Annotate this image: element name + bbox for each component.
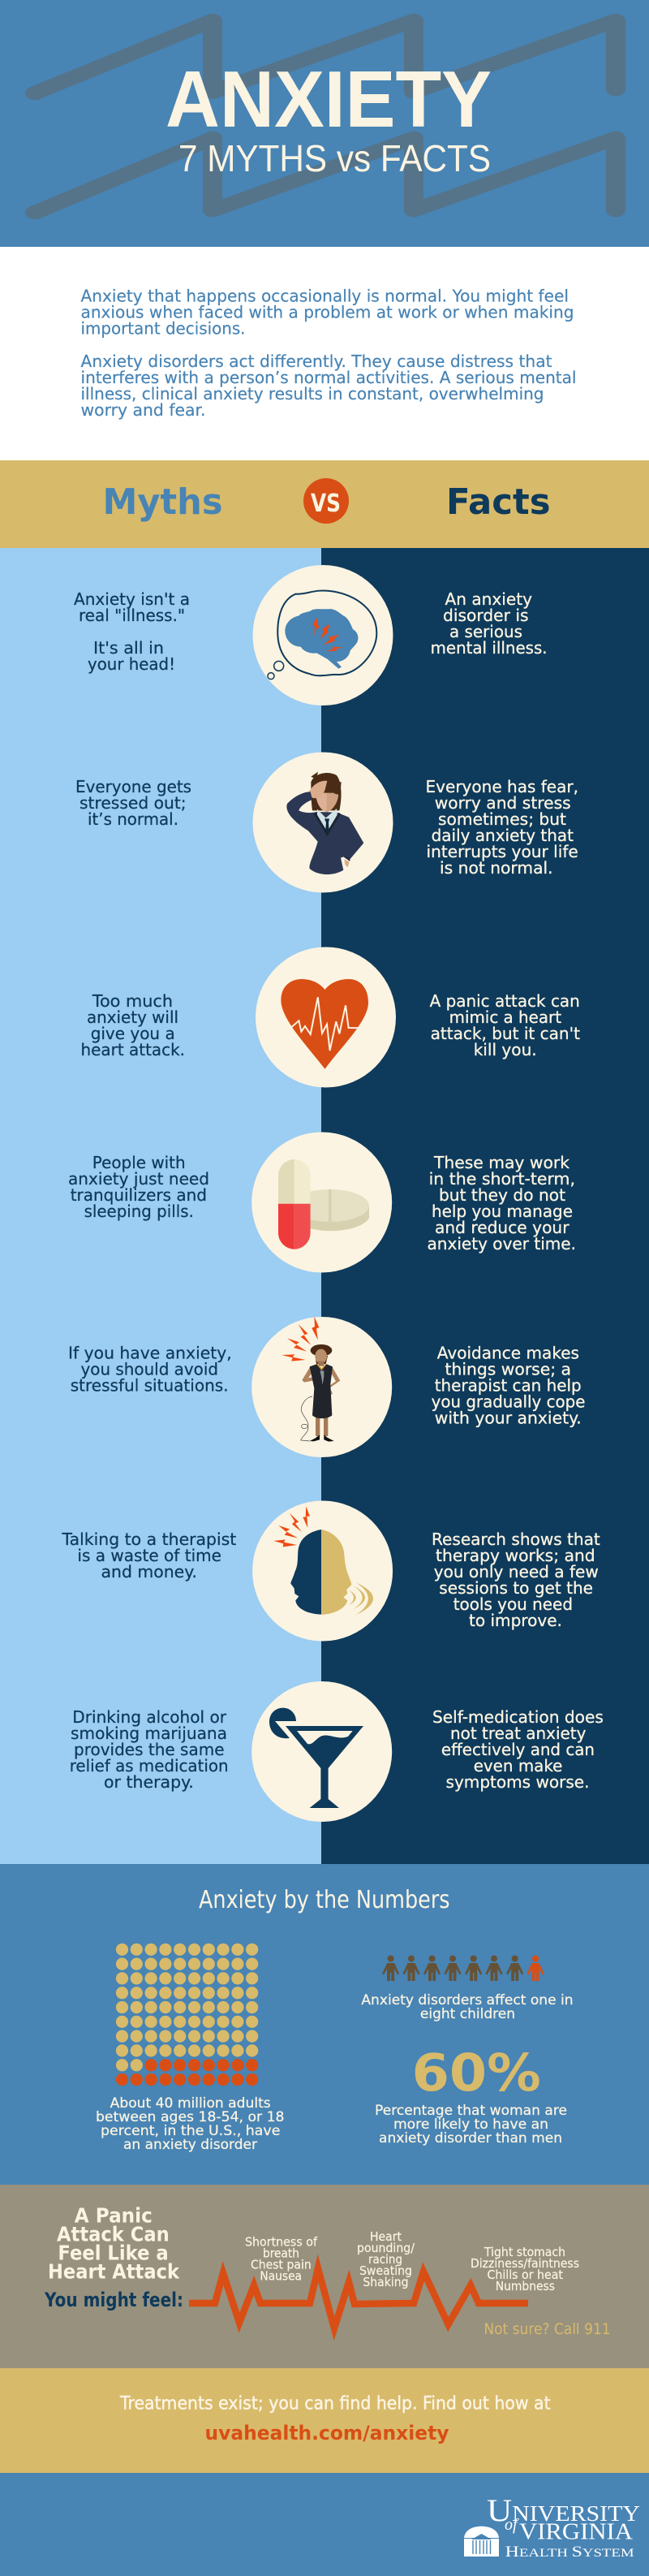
myth 7 text: smoking marijuana — [71, 1724, 227, 1743]
icon: woman with microphone — [251, 1317, 392, 1457]
myth 7 text: relief as medication — [70, 1756, 229, 1776]
chart: ecg line — [189, 2268, 528, 2328]
symptoms group 3: Dizziness/faintness — [471, 2256, 579, 2271]
fact 4 text — [427, 1153, 576, 1253]
panel: header — [0, 0, 649, 247]
fact 1 text: mental illness. — [431, 638, 548, 658]
logo: university of virginia health system — [464, 2493, 640, 2561]
myth 4 text: People with — [92, 1153, 186, 1172]
fact 7 text: even make — [474, 1756, 562, 1776]
fact 5 text: therapist can help — [435, 1375, 582, 1395]
myth 2 text — [75, 777, 191, 829]
heading: panic attack: A Panic — [75, 2203, 153, 2227]
icon: brain in thought bubble — [253, 565, 393, 705]
fact 2 text: worry and stress — [435, 793, 571, 813]
symptoms group 2: pounding/ — [357, 2241, 415, 2255]
myth 6 text: is a waste of time — [77, 1546, 221, 1565]
fact 4 text: but they do not — [439, 1185, 565, 1205]
myth 4 text — [68, 1153, 209, 1221]
symptoms group 2: Sweating — [359, 2263, 412, 2278]
fact 3 text: attack, but it can't — [431, 1024, 580, 1043]
heading: Anxiety by the Numbers — [199, 1886, 450, 1914]
logo: university of virginia health system: HEALTH SYSTEM — [505, 2544, 634, 2561]
symptoms group 2: Heart — [370, 2229, 402, 2244]
panel: myths background — [0, 548, 321, 1864]
symptoms group 2: Shaking — [363, 2275, 409, 2289]
myth 6 text — [62, 1530, 236, 1581]
panel: footer — [0, 2473, 649, 2576]
fact 7 text: Self-medication does — [432, 1707, 604, 1727]
symptoms group 1 — [245, 2235, 318, 2284]
myth 1 text: real "illness." — [79, 606, 185, 625]
icon: pills — [251, 1132, 392, 1273]
fact 5 text — [432, 1344, 585, 1427]
myth 3 text: Too much — [92, 991, 173, 1011]
fact 2 text: daily anxiety that — [432, 826, 574, 845]
caption: 40 million adults: an anxiety disorder — [123, 2137, 257, 2153]
panel: introduction: worry and fear. — [81, 400, 206, 420]
myth 2 text: it’s normal. — [88, 809, 178, 829]
panel: introduction: interferes with a person’s normal activities. A serious mental — [81, 368, 576, 387]
caption: 40 million adults: About 40 million adults — [110, 2095, 271, 2112]
panel: call to action — [0, 2368, 649, 2473]
panel: introduction: illness, clinical anxiety results in constant, overwhelming — [81, 384, 544, 403]
fact 1 text — [431, 589, 548, 658]
caption: 40 million adults: between ages 18-54, or 18 — [96, 2109, 284, 2125]
logo: university of virginia health system: UNIVERSITY — [487, 2493, 640, 2528]
fact 6 text: to improve. — [469, 1611, 562, 1630]
panel: introduction: Anxiety that happens occasionally is normal. You might feel — [81, 286, 569, 305]
fact 3 text: A panic attack can — [430, 991, 580, 1011]
icon: cocktail glass — [251, 1681, 392, 1822]
fact 5 text: Avoidance makes — [437, 1344, 579, 1363]
panel: anxiety by the numbers — [0, 1864, 649, 2185]
myth 1 text: It's all in — [93, 638, 164, 658]
myth 5 text — [68, 1344, 232, 1395]
myth 3 text: give you a — [91, 1024, 175, 1043]
myth 1 text: your head! — [88, 654, 175, 674]
myth 4 text: anxiety just need — [68, 1169, 209, 1189]
fact 7 text — [432, 1707, 604, 1792]
fact 4 text: help you manage — [432, 1202, 573, 1221]
fact 7 text: not treat anxiety — [450, 1724, 586, 1743]
fact 2 text: is not normal. — [440, 858, 553, 878]
fact 6 text — [432, 1530, 600, 1630]
note: call 911: Not sure? Call 911 — [484, 2320, 611, 2338]
myth 6 text: Talking to a therapist — [62, 1530, 236, 1549]
myth 3 text: anxiety will — [87, 1008, 178, 1027]
caption: 40 million adults — [96, 2095, 284, 2153]
title: ANXIETY — [165, 54, 492, 144]
myth 7 text: Drinking alcohol or — [72, 1707, 227, 1727]
symptoms group 3 — [471, 2245, 579, 2293]
caption: 60 percent: Percentage that woman are — [375, 2103, 567, 2119]
logo: university of virginia health system: VIRGINIA — [519, 2518, 633, 2544]
heading: panic attack: Feel Like a — [58, 2241, 169, 2264]
myth 7 text — [70, 1707, 229, 1792]
panel: introduction: anxious when faced with a problem at work or when making — [81, 302, 574, 321]
fact 1 text: An anxiety — [445, 589, 532, 609]
fact 5 text: with your anxiety. — [435, 1408, 582, 1427]
fact 7 text: effectively and can — [441, 1740, 595, 1759]
myth 6 text: and money. — [101, 1562, 197, 1581]
fact 2 text: sometimes; but — [438, 809, 566, 829]
symptoms group 2: racing — [368, 2252, 402, 2267]
label: you might feel: You might feel: — [44, 2289, 183, 2311]
fact 4 text: anxiety over time. — [427, 1234, 576, 1253]
heading: panic attack: Heart Attack — [48, 2260, 180, 2284]
fact 6 text: Research shows that — [432, 1530, 600, 1549]
caption: 60 percent: anxiety disorder than men — [379, 2130, 562, 2147]
fact 5 text: you gradually cope — [432, 1392, 585, 1411]
myth 2 text: stressed out; — [80, 793, 187, 813]
heading: panic attack: Attack Can — [57, 2222, 170, 2246]
symptoms group 1: Nausea — [260, 2269, 302, 2284]
fact 7 text: symptoms worse. — [446, 1772, 589, 1792]
fact 4 text: in the short-term, — [429, 1169, 575, 1189]
heading: facts: Facts — [446, 481, 550, 523]
icon: head with sound waves — [252, 1500, 393, 1642]
fact 2 text: interrupts your life — [427, 842, 578, 861]
myth 4 text: sleeping pills. — [84, 1202, 194, 1221]
symptoms group 3: Numbness — [496, 2279, 555, 2293]
fact 6 text: tools you need — [453, 1594, 573, 1614]
fact 3 text: mimic a heart — [449, 1008, 561, 1027]
panel: facts background — [321, 548, 649, 1864]
myth 1 text: Anxiety isn't a — [74, 589, 190, 609]
subtitle: 7 MYTHS vs FACTS — [178, 137, 491, 179]
fact 4 text: and reduce your — [435, 1218, 569, 1237]
caption: one in eight children: Anxiety disorders affect one in — [361, 1992, 574, 2009]
myth 5 text: you should avoid — [81, 1359, 218, 1379]
panel: introduction — [0, 247, 649, 460]
myth 4 text: tranquilizers and — [71, 1185, 207, 1205]
myth 7 text: provides the same — [74, 1740, 224, 1759]
myth 3 text — [81, 991, 185, 1059]
fact 2 text: Everyone has fear, — [425, 777, 578, 796]
fact 4 text: These may work — [433, 1153, 569, 1172]
panel: myths vs facts banner — [0, 460, 649, 548]
myth 7 text: or therapy. — [104, 1772, 194, 1792]
icon: vs badge — [303, 478, 349, 524]
fact 2 text — [425, 777, 578, 878]
panel: introduction: important decisions. — [81, 318, 245, 338]
panel: panic attack — [0, 2185, 649, 2368]
myth 3 text: heart attack. — [81, 1040, 185, 1059]
fact 6 text: therapy works; and — [436, 1546, 595, 1565]
myth 5 text: If you have anxiety, — [68, 1344, 232, 1363]
panel: introduction: Anxiety disorders act differently. They cause distress that — [81, 352, 552, 371]
symptoms group 1: breath — [263, 2246, 299, 2261]
symptoms group 1: Shortness of — [245, 2235, 318, 2250]
myth 2 text: Everyone gets — [75, 777, 191, 796]
big number: 60 percent: 60% — [412, 2043, 541, 2103]
caption: 60 percent: more likely to have an — [393, 2116, 548, 2133]
heading: panic attack — [48, 2203, 180, 2284]
heading: myths: Myths — [102, 481, 222, 523]
caption: 60 percent — [375, 2103, 567, 2147]
fact 5 text: things worse; a — [445, 1359, 571, 1379]
fact 3 text: kill you. — [474, 1040, 537, 1059]
fact 6 text: you only need a few — [434, 1562, 599, 1581]
symptoms group 3: Chills or heat — [487, 2267, 563, 2282]
text: treatments exist: Treatments exist; you can find help. Find out how at — [119, 2394, 551, 2414]
myth 5 text: stressful situations. — [71, 1375, 229, 1395]
symptoms group 1: Chest pain — [251, 2258, 312, 2272]
caption: 40 million adults: percent, in the U.S., have — [101, 2123, 280, 2139]
icon: heart with pulse — [256, 947, 396, 1088]
symptoms group 2 — [357, 2229, 415, 2289]
fact 1 text: a serious — [449, 622, 522, 641]
caption: one in eight children — [361, 1992, 574, 2022]
fact 6 text: sessions to get the — [439, 1578, 593, 1598]
fact 3 text — [430, 991, 580, 1059]
symptoms group 3: Tight stomach — [484, 2245, 565, 2259]
myth 1 text — [74, 589, 190, 674]
caption: one in eight children: eight children — [420, 2006, 515, 2022]
logo: university of virginia health system: of — [505, 2516, 519, 2534]
fact 1 text: disorder is — [443, 606, 529, 625]
icon: row of eight children — [382, 1955, 544, 1981]
dot chart: 18 percent of 100 — [116, 1944, 258, 2086]
icon: stressed woman — [253, 752, 393, 893]
icon: vs badge: VS — [311, 490, 341, 518]
link text: uvahealth.com/anxiety — [204, 2422, 449, 2444]
